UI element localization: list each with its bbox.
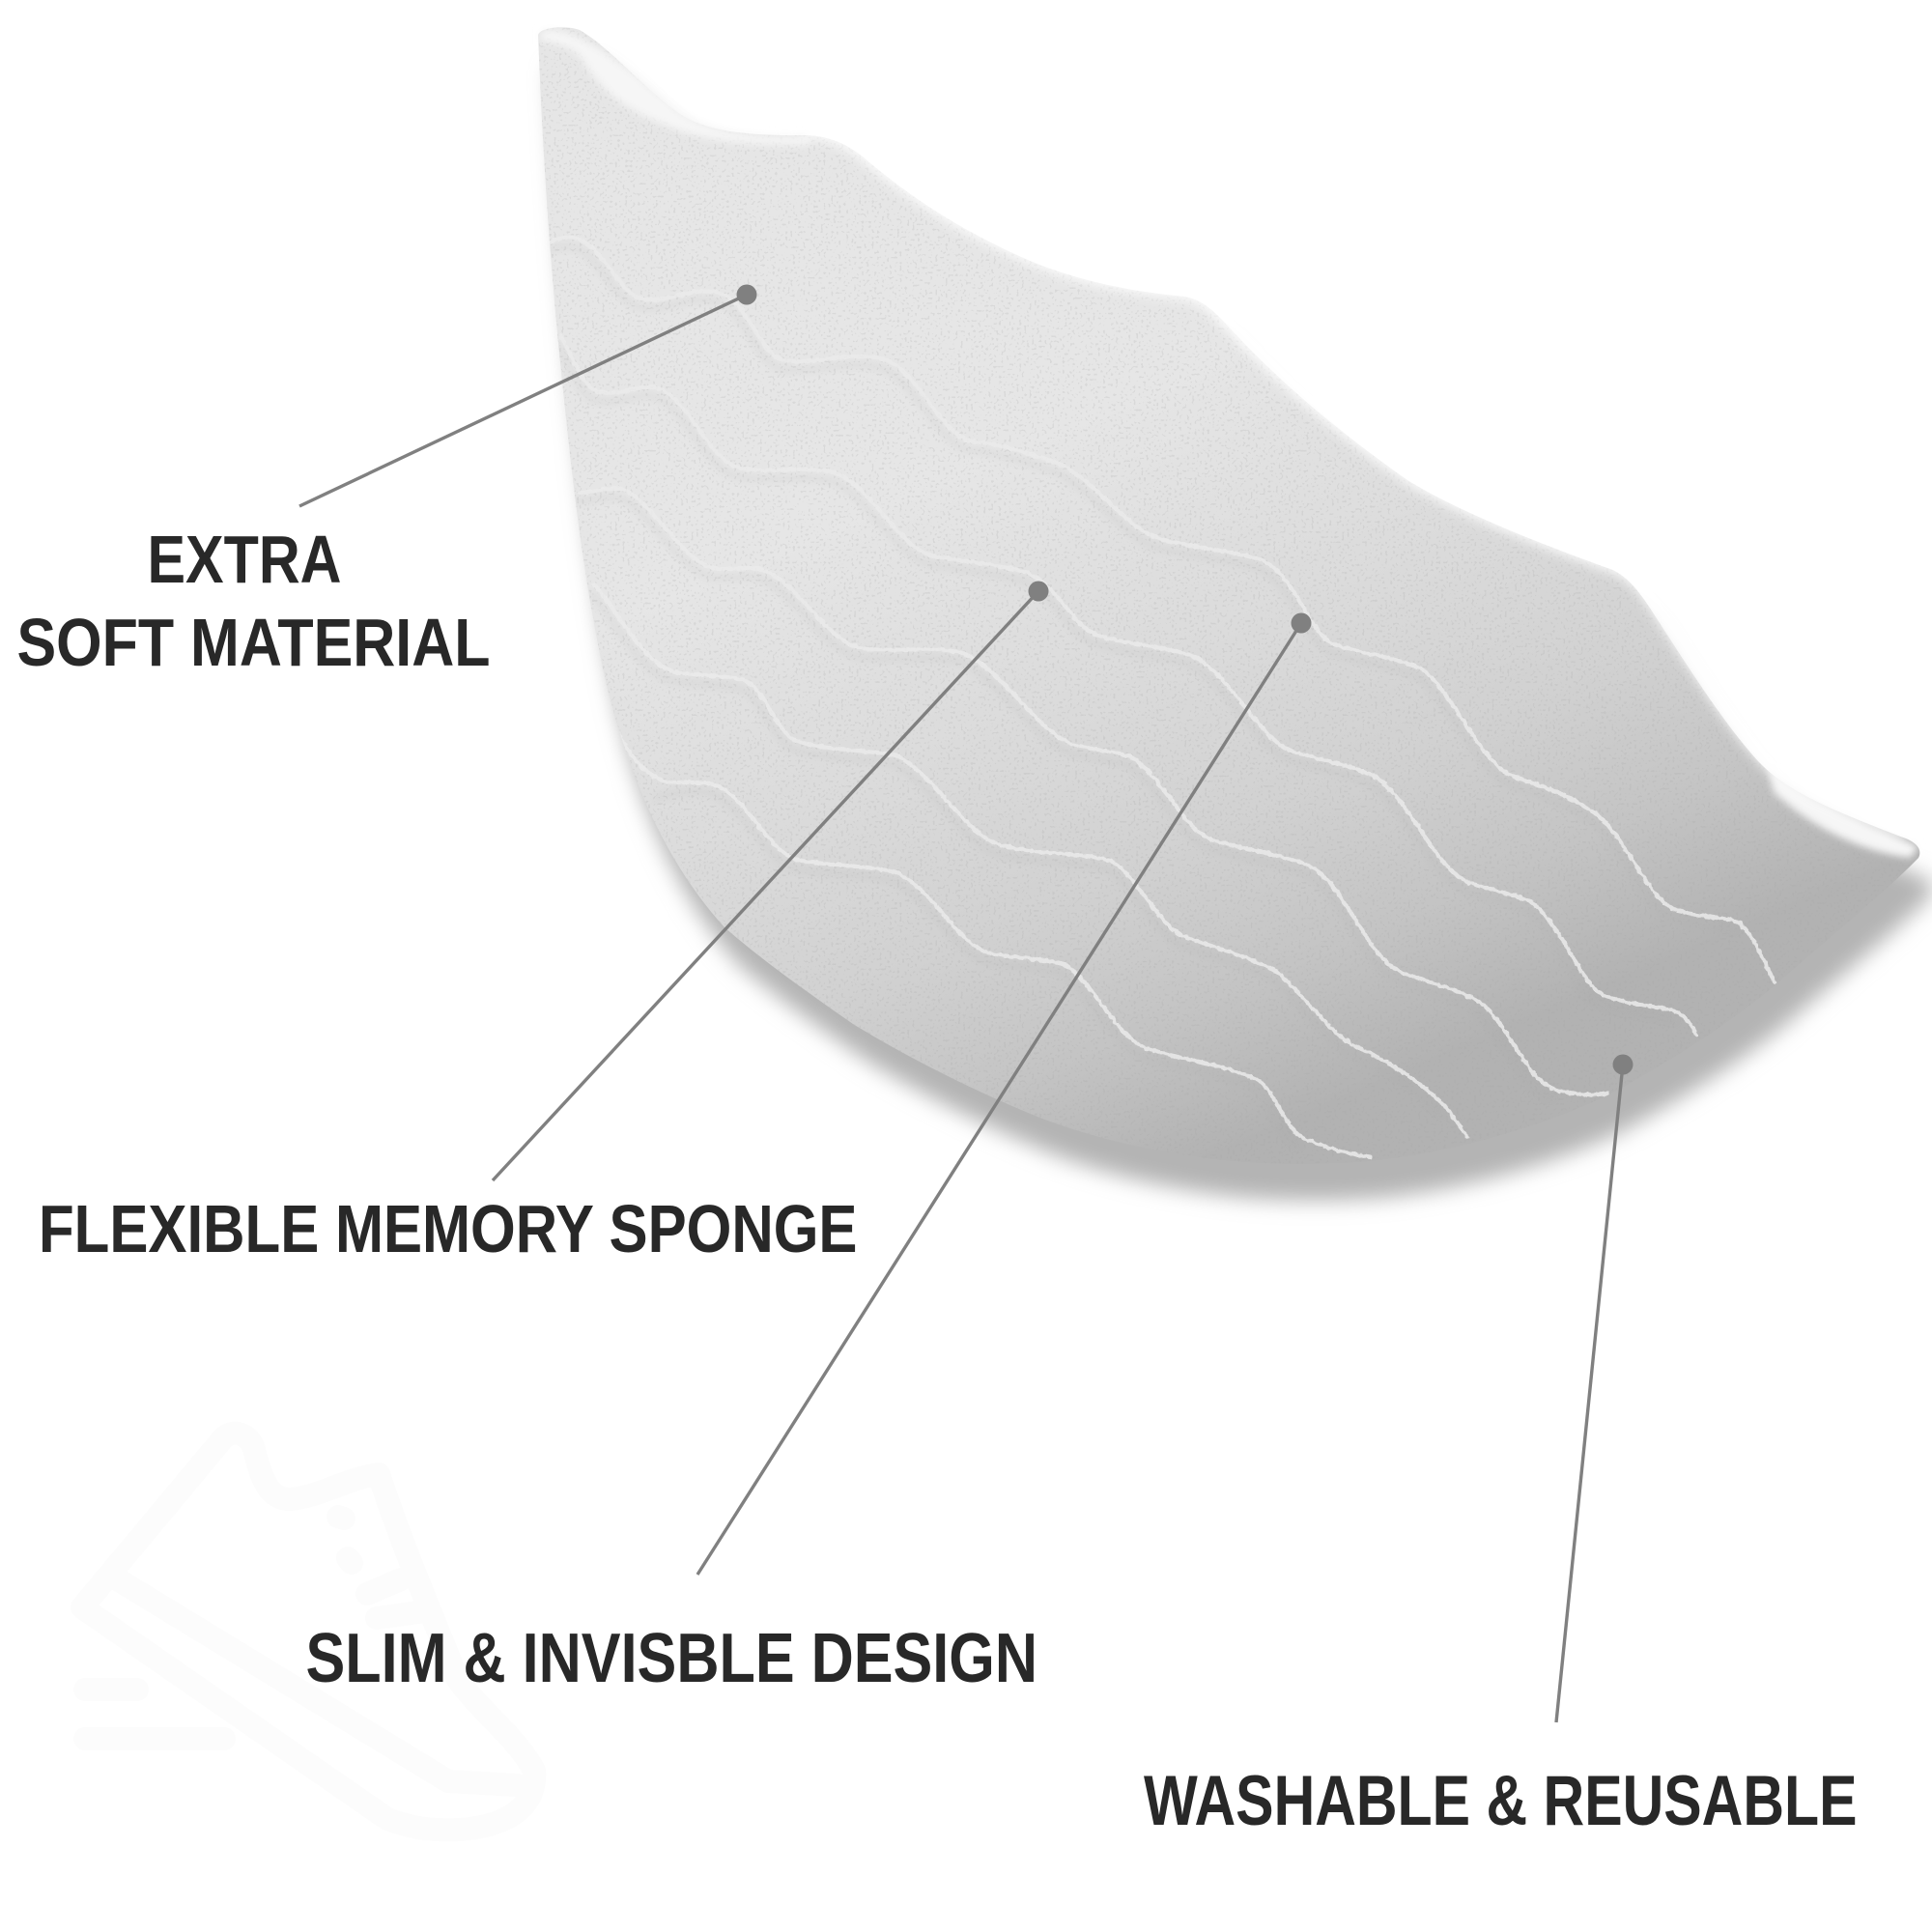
soft white fade along the top edge bbox=[807, 131, 1906, 833]
label: EXTRA bbox=[147, 522, 342, 597]
leader line bbox=[299, 295, 747, 506]
wave line 4 bbox=[594, 584, 1467, 1137]
label: FLEXIBLE MEMORY SPONGE bbox=[39, 1191, 858, 1266]
wavy stitching lines bbox=[548, 238, 1775, 1157]
callout: slim and invisible design bbox=[305, 612, 1312, 1697]
product: memory sponge pad bbox=[531, 19, 1932, 1201]
anchor dot bbox=[1613, 1055, 1633, 1074]
label: SOFT MATERIAL bbox=[17, 605, 491, 680]
wave line 2 bbox=[561, 336, 1696, 1035]
label: SLIM & INVISBLE DESIGN bbox=[305, 1620, 1037, 1697]
leader line bbox=[1556, 1065, 1623, 1722]
callout: flexible memory sponge bbox=[39, 582, 1049, 1266]
wave line 1 bbox=[551, 238, 1775, 982]
pad body bbox=[538, 27, 1919, 1164]
wave line 3 bbox=[580, 489, 1607, 1094]
leader line bbox=[493, 591, 1038, 1180]
icon: faint watermark shoe bbox=[82, 1434, 534, 1830]
callout: extra soft material bbox=[17, 284, 757, 680]
label bbox=[17, 522, 491, 680]
wave relief shadows bbox=[548, 246, 1734, 1146]
wave line 5 bbox=[609, 715, 1370, 1157]
anchor dot bbox=[1028, 582, 1049, 601]
pad top rim lip bbox=[541, 30, 1918, 858]
anchor dot bbox=[736, 284, 757, 305]
anchor dot bbox=[1291, 612, 1312, 634]
wave lines bbox=[551, 238, 1775, 1157]
pad drop shadow bbox=[552, 64, 1932, 1201]
leader line bbox=[697, 623, 1301, 1575]
callout: washable and reusable bbox=[1144, 1055, 1857, 1840]
sponge pore texture bbox=[539, 27, 1685, 1028]
